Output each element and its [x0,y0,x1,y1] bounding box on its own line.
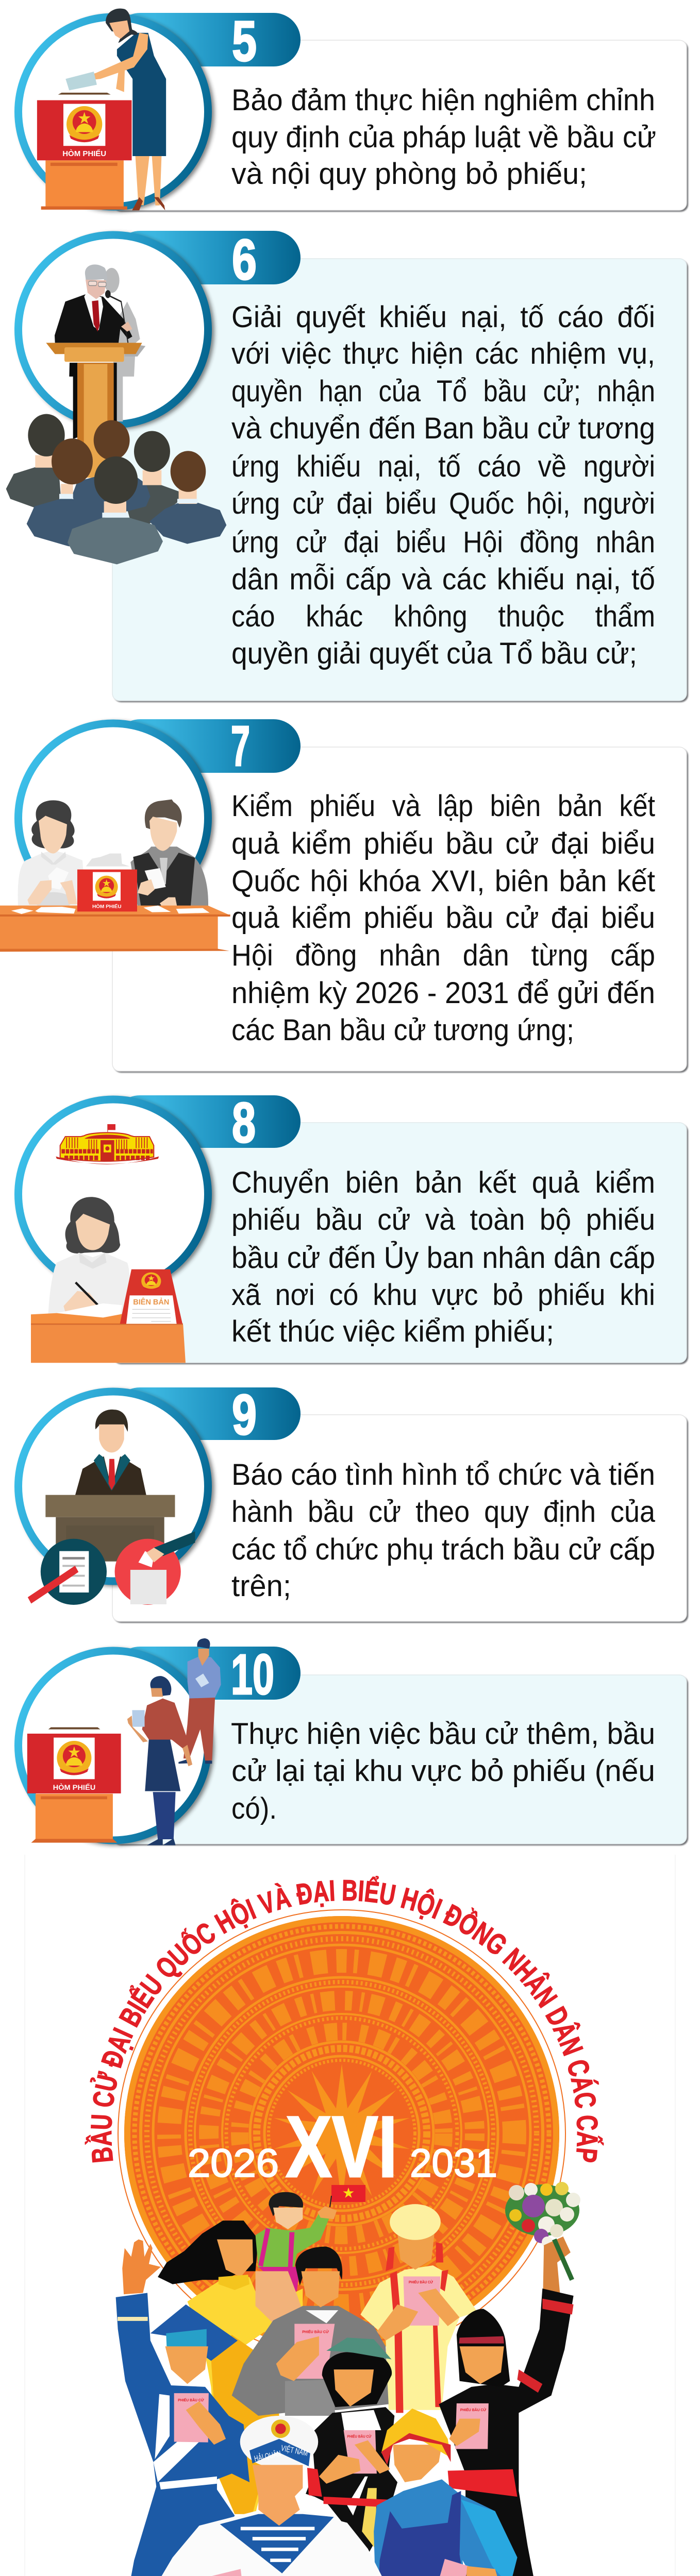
step 6 circle frame [19,235,208,425]
sailor [151,2416,387,2576]
step 5 text: quy định của pháp luật về bầu cử [231,121,656,154]
child with flag [256,2192,337,2329]
man with turban [360,2204,477,2413]
step 6 text: với việc thực hiện các nhiệm vụ, [231,337,655,370]
yellow ao dai woman [158,2221,303,2514]
step 5 illustration: woman voting at ballot box [37,9,166,210]
step 6 text: dân mỗi cấp và các khiếu nại, tố [231,563,655,596]
step 6 text: và chuyển đến Ban bầu cử tương [231,412,655,445]
step 7 text: Quốc hội khóa XVI, biên bản kết [231,865,655,898]
man with ballot [178,1638,221,1764]
year 2031: 2031 [410,2141,497,2185]
step 7 text: Hội đồng nhân dân từng cấp [231,939,655,972]
step 6 text: Giải quyết khiếu nại, tố cáo đối [231,300,655,334]
step 8 text: xã nơi có khu vực bỏ phiếu khi [231,1278,655,1312]
people group [116,2192,574,2576]
step 10 text: Thực hiện việc bầu cử thêm, bầu [231,1717,655,1751]
step 5 number tab [113,13,301,66]
panel: step 10 card [112,1675,687,1844]
step 6 text: quyền giải quyết của Tổ bầu cử; [231,637,637,670]
panel: step 6 card [112,259,687,701]
step 5 [18,9,688,212]
woman with green hat [306,2337,397,2554]
sailor: HẢI QUÂN [253,2448,282,2463]
step 8 text: bầu cử đến Ủy ban nhân dân cấp [231,1241,655,1275]
ballot box [77,870,137,911]
step 7 text: các Ban bầu cử tương ứng; [231,1013,574,1047]
step 8 text: Chuyển biên bản kết quả kiểm [231,1166,655,1199]
step 8 number tab [113,1095,301,1148]
ballot box [27,1734,121,1793]
step 9 text: hành bầu cử theo quy định của [231,1495,656,1529]
step 7 number tab [113,719,301,773]
step 7 circle frame [19,723,208,913]
step 8 text [231,1166,655,1348]
step 6 text: ứng cử đại biểu Quốc hội, người [231,487,655,520]
panel: step 9 card [112,1415,687,1621]
step 10 circle frame [19,1651,208,1840]
step 7 [0,715,688,1073]
icon: parliament building [56,1124,159,1164]
report book: BIÊN BẢN [133,1297,169,1307]
step 10 number tab [113,1647,301,1700]
woman in blue with mortarboard [116,2293,249,2576]
step 6 text: cáo khác không thuộc thẩm [231,600,655,633]
man in grey suit [232,2247,389,2416]
step 5 text: và nội quy phòng bỏ phiếu; [231,157,587,191]
woman with green hat: PHIẾU BẦU CỬ [347,2434,372,2439]
raised hand left [122,2240,161,2294]
step 6 text [231,300,655,670]
step 9 number: 9 [232,1383,257,1447]
step 5 circle frame [19,17,208,207]
arched title: BẦU CỬ ĐẠI BIỂU QUỐC HỘI VÀ ĐẠI BIỂU HỘI ĐỒNG NHÂN DÂN CÁC CẤP [85,1875,604,2163]
step 7 text: quả kiểm phiếu bầu cử đại biểu [231,827,655,860]
step 10 illustration: voters and ballot box [27,1638,221,1845]
step 6 text: ứng cử đại biểu Hội đồng nhân [231,526,655,559]
icon: Vietnam flag [330,2185,365,2207]
panel: step 8 card [112,1123,687,1363]
ballot box: HÒM PHIẾU [53,1783,95,1792]
step 7 text: nhiệm kỳ 2026 - 2031 để gửi đến [231,976,655,1010]
step 6 [6,228,688,702]
step 9 text: Báo cáo tình hình tổ chức và tiến [231,1458,655,1492]
central star [274,2064,410,2203]
step 9 text: các tổ chức phụ trách bầu cử cấp [231,1533,655,1566]
step 10 text: có). [231,1792,277,1825]
step 8 text: phiếu bầu cử và toàn bộ phiếu [231,1203,655,1236]
step 8 [18,1091,688,1364]
raised hand right [543,2236,571,2296]
worker with helmet [374,2409,518,2576]
step 9 number tab [113,1387,301,1440]
step 6 text: ứng khiếu nại, tố cáo về người [231,450,655,483]
step 10 text: cử lại tại khu vực bỏ phiếu (nếu [231,1754,655,1788]
desk [31,1313,186,1363]
step 7 text: Kiểm phiếu và lập biên bản kết [231,789,655,823]
step 7 text [231,789,655,1047]
step 5 text [231,83,656,191]
step 6 number: 6 [232,228,257,292]
panel: step 5 card [112,40,687,210]
ballot box [37,100,131,160]
step 9 illustration: official at podium with report and ballot icons [29,1410,195,1605]
audience [6,414,226,564]
step 9 text: trên; [231,1569,291,1603]
step 7 text: quả kiểm phiếu bầu cử đại biểu [231,901,655,935]
step 8 circle frame [19,1099,208,1289]
table [0,906,230,952]
step 9 [18,1383,688,1623]
step 8 number: 8 [232,1091,256,1155]
step 9 text [231,1458,656,1603]
icon: checklist report [29,1539,107,1605]
woman in blue with mortarboard: PHIẾU BẦU CỬ [178,2397,204,2402]
report book [120,1269,182,1324]
step 7 illustration: two people counting ballots at table [0,800,230,952]
step 10 [18,1638,688,1845]
woman in black ethnic dress [439,2289,574,2576]
panel: step 7 card [112,747,687,1071]
year 2026: 2026 [188,2141,279,2185]
step 6 number tab [113,231,301,284]
bronze drum [118,1910,565,2357]
step 10 number: 10 [231,1643,274,1706]
man in grey suit: PHIẾU BẦU CỬ [302,2329,329,2334]
woman in black ethnic dress: PHIẾU BẦU CỬ [460,2407,487,2412]
ballot box: HÒM PHIẾU [92,903,122,909]
step 5 number: 5 [232,10,257,73]
step 7 number: 7 [231,715,250,778]
term label XVI: XVI [286,2098,397,2195]
poster: election XVI [85,1875,604,2576]
step 10 text [231,1717,655,1825]
icon: flower bouquet [505,2182,580,2248]
sailor: VIỆT NAM [280,2443,309,2458]
ballot box: HÒM PHIẾU [62,149,106,158]
step 8 illustration: woman writing report, National Assembly building [31,1124,186,1363]
step 5 text: Bảo đảm thực hiện nghiêm chỉnh [231,83,655,117]
man with turban: PHIẾU BẦU CỬ [409,2279,434,2284]
step 8 text: kết thúc việc kiểm phiếu; [231,1315,554,1348]
woman with ballot [127,1676,192,1845]
icon: ballot casting [115,1531,195,1605]
step 6 illustration: speaker at podium and audience [6,264,226,564]
step 9 circle frame [19,1392,208,1581]
